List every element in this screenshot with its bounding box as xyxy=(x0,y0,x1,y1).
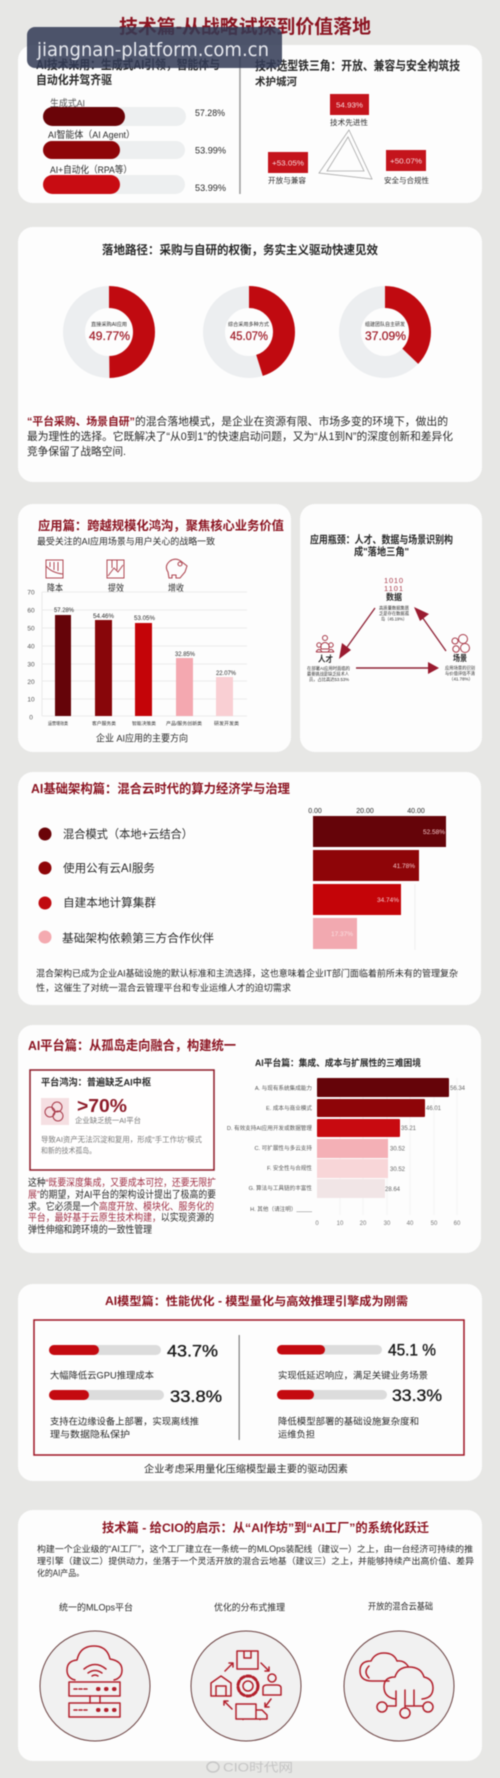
watermark: Weibo source xyxy=(207,1760,293,1774)
stat: over 70 percent: >70% xyxy=(77,1096,127,1116)
bar chart: deployment modes: 17.37% xyxy=(331,931,353,938)
bar: generative AI: 57.28% xyxy=(195,108,226,119)
bar chart: platform difficulties: 0 xyxy=(315,1221,319,1227)
donut: in-house development: 组建团队自主研发 xyxy=(365,321,405,328)
bar chart: platform difficulties: D. 有效支持AI应用开发或数据管理 xyxy=(227,1124,312,1132)
panel: technology adoption and triangle xyxy=(18,45,482,203)
bar chart: application directions: 20 xyxy=(27,679,35,686)
node: scenario: （41.78%） xyxy=(449,676,473,682)
callout: platform gap: 平台鸿沟：普遍缺乏AI中枢 xyxy=(41,1076,151,1088)
stat: lower complexity: 33.3% xyxy=(392,1386,442,1405)
bar chart: platform difficulties: C. 可扩展性与多云支持 xyxy=(254,1144,312,1152)
bar chart: platform difficulties: 35.21 xyxy=(401,1126,417,1132)
pillar: MLOps platform xyxy=(40,1602,150,1741)
bar chart: platform difficulties: F. 安全性与合规性 xyxy=(267,1164,312,1172)
callout: platform gap: 企业缺乏统一AI平台 xyxy=(75,1115,141,1125)
chart caption: 企业 AI应用的主要方向 xyxy=(96,732,188,744)
legend: 使用公有云AI服务 xyxy=(63,861,155,875)
donut: mixed methods: 综合采用多种方式 xyxy=(228,321,269,328)
node: scenario: 场景 xyxy=(453,653,467,663)
pillar: MLOps platform: 统一的MLOps平台 xyxy=(59,1602,133,1612)
bar: AI plus automation xyxy=(43,164,227,194)
bar chart: application directions: 智能决策类 xyxy=(132,720,156,727)
stat: low latency xyxy=(277,1340,436,1380)
stat: lower complexity: 降低模型部署的基础设施复杂度和 xyxy=(278,1416,419,1426)
radar triangle xyxy=(319,130,372,179)
metric: technology advancement: 54.93% xyxy=(336,100,363,110)
icon: cost reduction xyxy=(46,560,63,578)
arrow: scenario to data xyxy=(414,607,446,651)
panel: landing path xyxy=(18,227,482,482)
bar chart: application directions: 产品/服务创新类 xyxy=(166,720,202,727)
bar chart: platform difficulties: A. 与现有系统集成能力 xyxy=(255,1084,312,1092)
bar chart: deployment modes: 41.78% xyxy=(393,863,415,870)
bar chart: platform difficulties: 30.52 xyxy=(390,1167,406,1173)
bar: AI plus automation: AI+自动化（RPA等） xyxy=(50,164,132,176)
heading: bottleneck: 应用瓶颈：人才、数据与场景识别构 xyxy=(310,533,453,546)
text block: AI factory: 构建一个企业级的“AI工厂”，这个工厂建立在一条统一的MLOps装配线（建议一）之上，由一台经济可持续的推 xyxy=(37,1543,473,1554)
donut: direct purchase xyxy=(74,297,144,367)
bar chart: platform difficulties: 46.01 xyxy=(426,1106,442,1112)
bar chart: application directions: 57.28% xyxy=(54,608,75,614)
pillar: hybrid cloud xyxy=(344,1600,454,1741)
arrow: data to talent xyxy=(339,608,375,659)
heading: application: 应用篇：跨越规模化鸿沟，聚焦核心业务价值 xyxy=(38,518,284,533)
heading: landing path: 落地路径：采购与自研的权衡，务实主义驱动快速见效 xyxy=(102,242,378,257)
text block: platform expectations: 平台，最好基于云原生技术构建，以实现资源的 xyxy=(28,1211,214,1224)
bar chart: deployment modes: 34.74% xyxy=(377,897,399,904)
bar chart: deployment modes xyxy=(308,808,446,950)
bar chart: platform difficulties: 56.34 xyxy=(450,1086,466,1092)
icon: cloud server xyxy=(67,1646,122,1717)
node: talent: 在部署AI应用时面临的 xyxy=(307,665,350,672)
bar chart: deployment modes: 52.58% xyxy=(423,829,445,836)
node: data: 1101 xyxy=(384,584,403,593)
panel: application bottleneck triangle xyxy=(300,504,482,752)
node: data: 乏是存在数据孤 xyxy=(379,610,410,617)
subtitle: 最受关注的AI应用场景与用户关心的战略一致 xyxy=(37,536,215,546)
stat: low latency: 实现低延迟响应，满足关键业务场景 xyxy=(278,1370,428,1380)
text block: platform expectations: 这种“既要深度集成，又要成本可控，还要无限扩 xyxy=(28,1176,216,1189)
node: data: 岛（45.19%） xyxy=(381,616,407,622)
bar chart: platform difficulties: 40 xyxy=(407,1221,414,1227)
heading: iron triangle: 技术选型铁三角：开放、兼容与安全构筑技 xyxy=(255,58,460,73)
bar chart: application directions: 70 xyxy=(27,590,35,596)
node: talent: 人才 xyxy=(318,654,333,664)
icon labels xyxy=(47,582,184,594)
text block: platform expectations xyxy=(28,1176,216,1236)
node: data: 高质量数据集匮 xyxy=(379,604,410,612)
metric: technology advancement xyxy=(330,94,369,127)
bar: AI agent: AI智能体（AI Agent） xyxy=(48,129,135,141)
bar chart: application directions xyxy=(27,590,247,727)
stat: edge deployment xyxy=(49,1387,222,1440)
bar chart: platform difficulties: 28.64 xyxy=(385,1187,401,1193)
bar chart: platform difficulties: H. 其他（请注明）_____ xyxy=(250,1205,313,1213)
metric: security and compliance: +50.07% xyxy=(390,156,422,166)
stat: GPU cost xyxy=(49,1342,218,1380)
bar chart: platform difficulties: G. 算法与工具链的丰富性 xyxy=(249,1184,312,1192)
bar chart: application directions: 22.07% xyxy=(216,671,237,677)
title: 技术篇-从战略试探到价值落地 xyxy=(119,15,371,38)
pillar: hybrid cloud: 开放的混合云基础 xyxy=(368,1600,433,1612)
callout: platform gap: 和新的技术孤岛。 xyxy=(41,1145,96,1155)
metric: openness and compatibility: +53.05% xyxy=(272,158,304,168)
text block: infrastructure summary: 性，这催生了对统一混合云管理平台和专业运维人才的迫切需求 xyxy=(36,982,291,993)
stat: lower complexity: 运维负担 xyxy=(278,1428,315,1440)
icon: hybrid clouds xyxy=(360,1653,433,1718)
legend: 自建本地计算集群 xyxy=(63,896,157,910)
bar chart: platform difficulties: 30 xyxy=(384,1221,391,1227)
text block: platform expectations: 弹性伸缩和跨环境的一致性管理 xyxy=(28,1223,152,1236)
metric: security and compliance: 安全与合规性 xyxy=(384,175,429,185)
heading: CIO recommendations: 技术篇 - 给CIO的启示：从“AI作坊”到“AI工厂”的系统化跃迁 xyxy=(102,1520,429,1535)
text block: AI factory: 理引擎（建议二）提供动力，坐落于一个灵活开放的混合云地基（建议三）之上，并能够持续产出高价值、差异 xyxy=(37,1555,474,1566)
stat: low latency: 45.1 % xyxy=(388,1340,436,1360)
bar chart: application directions: 50 xyxy=(27,626,35,632)
bar chart: deployment modes: 40.00 xyxy=(407,808,425,815)
legend xyxy=(38,827,215,945)
text block: AI factory xyxy=(37,1543,474,1578)
bar chart: application directions: 40 xyxy=(27,644,35,650)
icon labels: 提效 xyxy=(108,582,124,594)
node: scenario: 应用场景的识别 xyxy=(445,664,475,672)
icon: logistics cycle xyxy=(211,1651,281,1720)
bar: AI agent: 53.99% xyxy=(195,146,227,156)
bar: AI agent xyxy=(43,129,227,159)
panel: application chart xyxy=(18,504,291,752)
heading: AI model: AI模型篇：性能优化 - 模型量化与高效推理引擎成为刚需 xyxy=(105,1294,408,1308)
bar chart: application directions: 53.05% xyxy=(134,616,156,622)
bar chart: application directions: 研发开发类 xyxy=(214,720,239,727)
icon labels: 增收 xyxy=(168,582,184,594)
node: scenario xyxy=(445,634,476,682)
node: talent: 最要挑战是缺乏技术人 xyxy=(307,670,350,678)
donut: mixed methods: 45.07% xyxy=(230,329,268,343)
bar chart: application directions: 0 xyxy=(29,714,33,722)
bar chart: application directions: 30 xyxy=(27,662,35,668)
heading: infrastructure: AI基础架构篇：混合云时代的算力经济学与治理 xyxy=(31,781,290,796)
bar chart: application directions: 32.85% xyxy=(175,652,196,658)
text block: infrastructure summary xyxy=(36,968,458,993)
metric: technology advancement: 技术先进性 xyxy=(330,117,369,127)
node: data: 数据 xyxy=(386,592,402,602)
text block: platform expectations: 展”的期望，对AI平台的架构设计提出了极高的要 xyxy=(28,1188,216,1201)
icon: overlapping circles xyxy=(41,1098,69,1125)
heading: bottleneck: 成"落地三角" xyxy=(354,545,409,558)
text block: infrastructure summary: 混合架构已成为企业AI基础设施的默认标准和主流选择，这也意味着企业IT部门面临着前所未有的管理复杂 xyxy=(36,968,458,978)
legend: 混合模式（本地+云结合） xyxy=(63,827,193,841)
text block: landing summary: 最为理性的选择。它既解决了“从0到1”的快速启动问题，又为“从1到N”的深度创新和差异化 xyxy=(27,429,453,443)
donut: in-house development xyxy=(350,297,420,367)
heading: platform chart: AI平台篇：集成、成本与扩展性的三难困境 xyxy=(255,1057,421,1068)
callout: platform gap: 导致AI资产无法沉淀和复用，形成"手工作坊"模式 xyxy=(41,1134,202,1144)
icon labels: 降本 xyxy=(47,582,63,594)
donut: mixed methods xyxy=(214,297,284,367)
panel: AI platform xyxy=(18,1025,481,1253)
bar chart: application directions: 54.46% xyxy=(93,614,115,620)
heading: technology adoption: AI技术采用：生成式AI引领，智能体与 xyxy=(36,57,220,72)
watermark banner: jiangnan-platform.com.cn xyxy=(36,39,269,61)
heading: bottleneck xyxy=(310,533,453,558)
bar: AI plus automation: 53.99% xyxy=(195,183,227,194)
bar: generative AI: 生成式AI xyxy=(50,98,85,110)
bar chart: platform difficulties: 20 xyxy=(360,1221,367,1227)
bar chart: application directions: 客户服务类 xyxy=(92,720,116,727)
bar chart: platform difficulties: 60 xyxy=(454,1221,461,1227)
text block: AI factory: 化的AI产品。 xyxy=(37,1567,84,1578)
heading: technology adoption line 2: 自动化并驾齐驱 xyxy=(36,72,112,87)
heading: AI platform: AI平台篇：从孤岛走向融合，构建统一 xyxy=(28,1038,236,1053)
stat: edge deployment: 33.8% xyxy=(170,1387,222,1406)
bar chart: application directions: 60 xyxy=(27,608,35,614)
icon: piggy bank xyxy=(166,559,187,578)
legend: 基础架构依赖第三方合作伙伴 xyxy=(62,931,215,945)
callout: platform gap xyxy=(30,1070,214,1170)
stat: edge deployment: 支持在边缘设备上部署，实现离线推 xyxy=(50,1416,199,1426)
box: model stats xyxy=(34,1320,464,1455)
text block: landing summary: 竞争保留了战略空间. xyxy=(27,444,126,458)
metric: openness and compatibility xyxy=(268,152,308,185)
text block: landing summary: “平台采购、场景自研”的混合落地模式，是企业在资源有限、市场多变的环境下，做出的 xyxy=(27,414,448,428)
panel: AI model xyxy=(18,1284,482,1481)
watermark: Weibo source: CIO时代网 xyxy=(223,1760,293,1774)
icon: efficiency xyxy=(107,560,124,578)
donut: direct purchase: 直接采购AI应用 xyxy=(91,321,127,328)
donut: in-house development: 37.09% xyxy=(365,329,406,343)
stat: lower complexity xyxy=(277,1386,442,1440)
bar chart: application directions: 运营增效类 xyxy=(48,720,68,727)
bar chart: platform difficulties: 50 xyxy=(431,1221,438,1227)
bar: generative AI xyxy=(43,98,226,126)
metric: security and compliance xyxy=(384,150,429,185)
heading: iron triangle line 2: 术护城河 xyxy=(255,75,297,88)
pillar: distributed inference xyxy=(191,1602,301,1741)
node: scenario: 与价值评估不清 xyxy=(445,670,476,677)
panel: CIO recommendations xyxy=(18,1510,482,1761)
node: talent xyxy=(307,636,350,683)
stat: GPU cost: 43.7% xyxy=(167,1342,218,1360)
stat: GPU cost: 大幅降低云GPU推理成本 xyxy=(50,1370,154,1380)
stat: edge deployment: 理与数据隐私保护 xyxy=(50,1428,130,1440)
bar chart: platform difficulties: E. 成本与商业模式 xyxy=(266,1104,312,1112)
caption: model drivers: 企业考虑采用量化压缩模型最主要的驱动因素 xyxy=(144,1462,348,1476)
text block: platform expectations: 求。它必须是一个高度开放、模块化、服务化的 xyxy=(28,1200,214,1213)
pillar: distributed inference: 优化的分布式推理 xyxy=(214,1602,285,1612)
node: data xyxy=(379,576,410,622)
node: data: 1010 xyxy=(384,576,403,585)
donut: direct purchase: 49.77% xyxy=(89,329,130,343)
node: talent: 员，占比高达53.53% xyxy=(309,676,349,683)
text block: landing summary xyxy=(27,414,453,458)
bar chart: platform difficulties xyxy=(227,1078,466,1227)
bar chart: deployment modes: 20.00 xyxy=(356,808,374,815)
watermark banner xyxy=(27,27,282,68)
bar chart: platform difficulties: 30.52 xyxy=(390,1146,406,1152)
panel: infrastructure xyxy=(18,772,481,1005)
arrow: talent to scenario xyxy=(356,662,439,674)
bar chart: deployment modes: 0.00 xyxy=(308,808,322,815)
bar chart: application directions: 10 xyxy=(27,696,35,704)
bar chart: platform difficulties: 10 xyxy=(337,1221,344,1227)
metric: openness and compatibility: 开放与兼容 xyxy=(268,175,307,185)
